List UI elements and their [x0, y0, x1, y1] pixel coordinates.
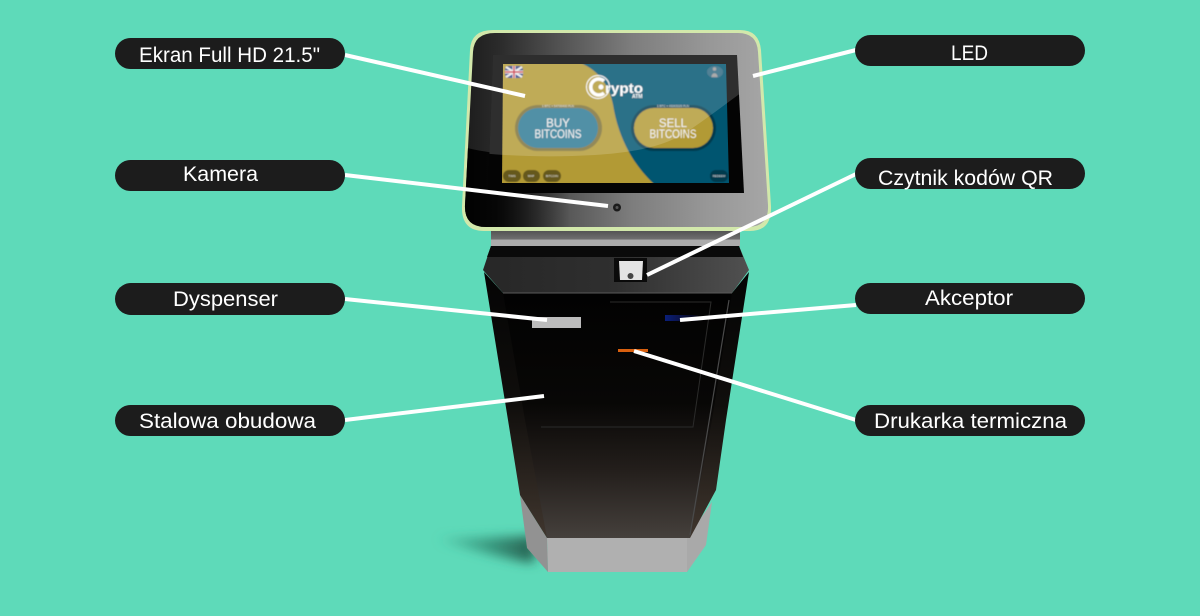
connector lines — [345, 50, 856, 420]
bottom buttons: BITCOIN — [546, 174, 558, 178]
monitor — [460, 30, 771, 240]
bottom buttons: MAP — [528, 174, 534, 178]
neck — [491, 228, 740, 246]
label: LED — [855, 35, 1085, 66]
sell button: SELL — [659, 118, 688, 130]
label: Drukarka termiczna: Drukarka termiczna — [874, 410, 1067, 433]
logo: ATM — [632, 94, 642, 100]
steel cabinet — [484, 272, 749, 538]
label: Kamera — [115, 160, 345, 191]
buy button: BITCOINS — [534, 129, 582, 141]
label: Ekran Full HD 21.5: Ekran Full HD 21.5" — [139, 44, 320, 67]
bill acceptor — [665, 315, 698, 321]
top head panel — [483, 246, 749, 293]
thermal printer slot — [618, 349, 648, 352]
infographic: Crypto ATM anatomy — [115, 30, 1085, 572]
flag — [505, 66, 523, 78]
label: Kamera: Kamera — [183, 163, 258, 186]
sell button — [631, 104, 716, 151]
sell button: BITCOINS — [650, 129, 697, 141]
buy button: BUY — [546, 118, 570, 130]
kiosk — [483, 228, 749, 572]
label: Czytnik kodow QR — [855, 158, 1085, 190]
label: Drukarka termiczna — [855, 405, 1085, 436]
glass glare — [490, 55, 739, 156]
bezel — [465, 33, 768, 227]
logo — [586, 76, 643, 100]
label: Stalowa obudowa: Stalowa obudowa — [139, 410, 316, 433]
label: Akceptor — [855, 283, 1085, 314]
label: Akceptor: Akceptor — [925, 287, 1013, 310]
buy button: 1 BTC = 54706400 PLN — [542, 104, 574, 108]
label: LED: LED — [951, 42, 988, 65]
user icon — [707, 66, 723, 78]
floor shadow — [438, 536, 535, 562]
screen frame — [488, 55, 744, 193]
bottom buttons: REDEEM — [713, 174, 726, 178]
label: Stalowa obudowa — [115, 405, 345, 436]
QR code reader — [614, 258, 647, 282]
buy button — [515, 104, 602, 151]
cash dispenser slot — [532, 317, 581, 328]
label: Dyspenser: Dyspenser — [173, 288, 278, 311]
screen — [502, 64, 729, 183]
camera — [613, 204, 621, 212]
logo: rypto — [605, 80, 643, 96]
bottom buttons: TIMS — [508, 174, 516, 178]
metal base — [520, 495, 712, 572]
sell button: 1 BTC = 49063029 PLN — [657, 104, 689, 108]
label: Czytnik kodow QR: Czytnik kodów QR — [878, 167, 1053, 190]
bottom buttons — [503, 170, 728, 182]
label: Ekran Full HD 21.5 — [115, 38, 345, 69]
label: Dyspenser — [115, 283, 345, 315]
